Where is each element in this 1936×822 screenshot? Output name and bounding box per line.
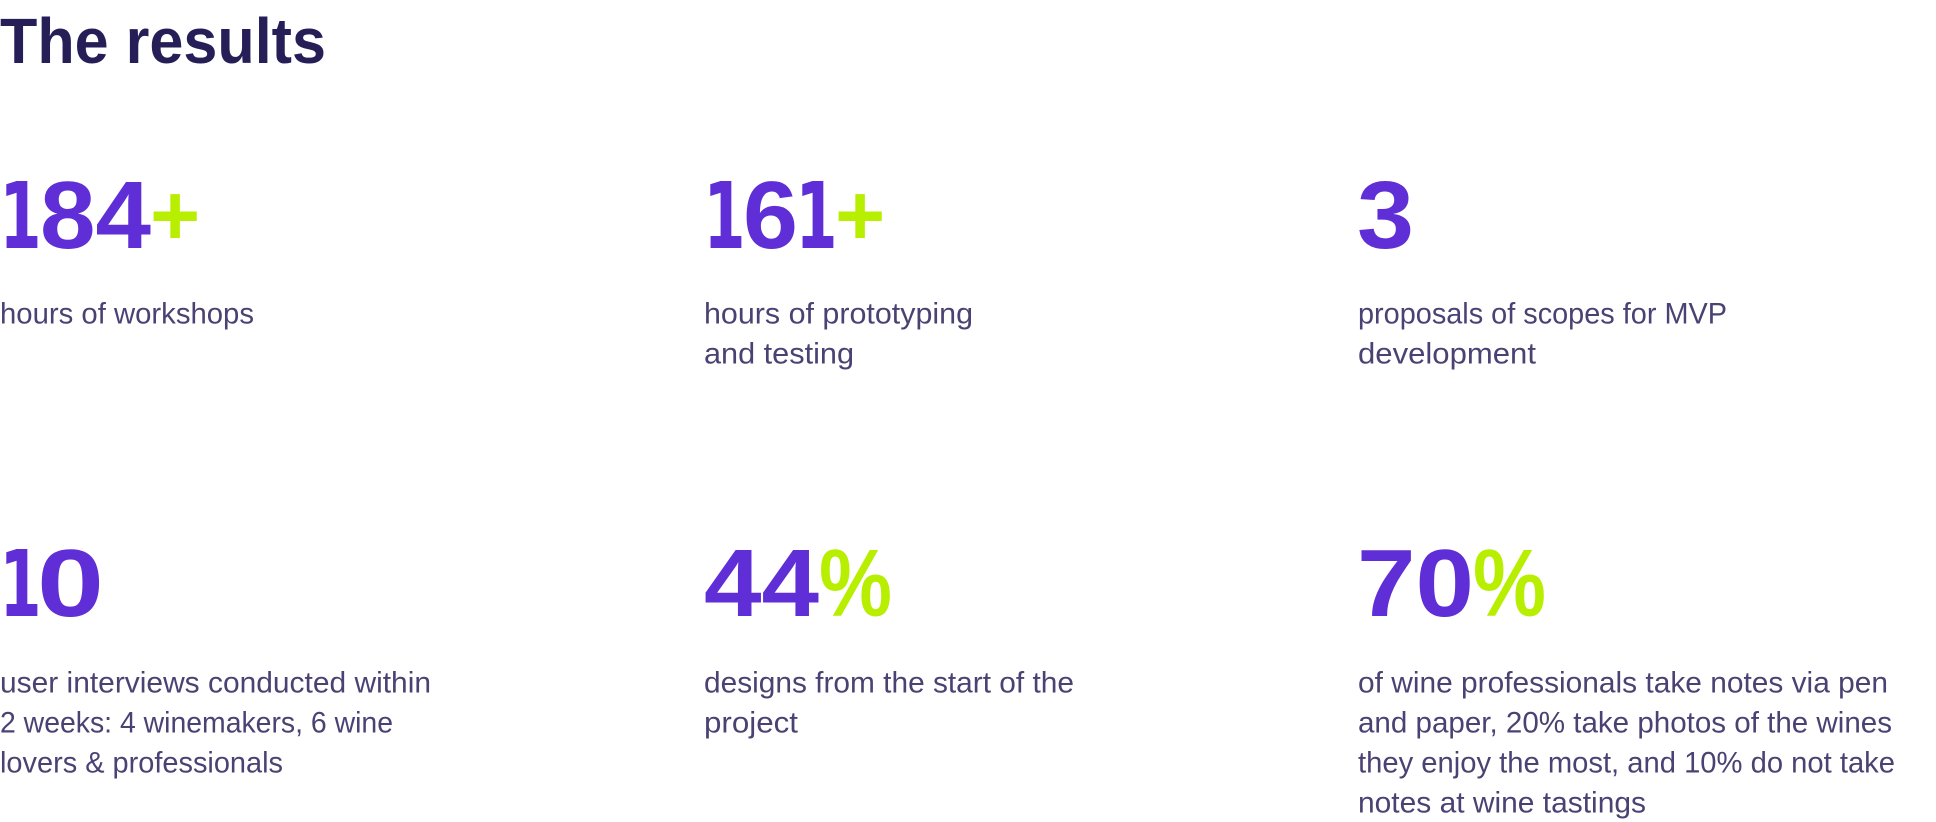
description: of wine professionals take notes via pen (1358, 667, 1888, 700)
number: 10 (0, 530, 104, 638)
number: 44%: % (819, 530, 892, 637)
description: and paper, 20% take photos of the wines (1358, 707, 1892, 740)
description: hours of prototyping (704, 298, 973, 330)
number: 10: 0 (37, 530, 104, 637)
description: user interviews conducted within (0, 667, 431, 700)
description: notes at wine tastings (1358, 787, 1646, 820)
stat: 44% designs (704, 530, 1074, 740)
number: 161+: + (835, 168, 885, 264)
number: 10: 1 (0, 531, 42, 638)
number: 184+ (0, 162, 200, 270)
stat: 184+ hours of workshops (0, 162, 254, 330)
number: 44% (704, 530, 892, 637)
number: 70%: % (1473, 530, 1546, 637)
description (0, 667, 431, 780)
description: lovers & professionals (0, 747, 283, 780)
description: development (1358, 338, 1537, 370)
description: and testing (704, 338, 854, 370)
number: 184+: + (150, 168, 200, 264)
description: project (704, 707, 799, 740)
number: 184+: 1 (0, 163, 42, 270)
number: 161+ (704, 162, 885, 270)
number: 70%: 70 (1357, 530, 1474, 637)
number: 3: 3 (1357, 162, 1414, 269)
number: 161+: 6 (743, 162, 798, 269)
number: 184+: 84 (40, 162, 151, 269)
number: 161+: 1 (704, 163, 746, 270)
stat: 70% wine professionals (1357, 530, 1895, 820)
description (1358, 298, 1727, 370)
description: proposals of scopes for MVP (1358, 298, 1727, 330)
stat: 10 user interviews (0, 530, 431, 780)
description: designs from the start of the (704, 667, 1074, 700)
description (704, 298, 973, 370)
title: The results (0, 5, 326, 77)
description (704, 667, 1074, 740)
description: hours of workshops (0, 298, 254, 330)
description (1358, 667, 1895, 820)
number: 44%: 44 (704, 530, 819, 637)
description: 2 weeks: 4 winemakers, 6 wine (0, 707, 393, 740)
stat: 161+ hours of prototyping and testing (704, 162, 973, 370)
number: 70% (1357, 530, 1546, 637)
description: they enjoy the most, and 10% do not take (1358, 747, 1895, 780)
number: 161+: 1 (796, 163, 838, 270)
stat: 3 proposals of scopes (1357, 162, 1727, 370)
